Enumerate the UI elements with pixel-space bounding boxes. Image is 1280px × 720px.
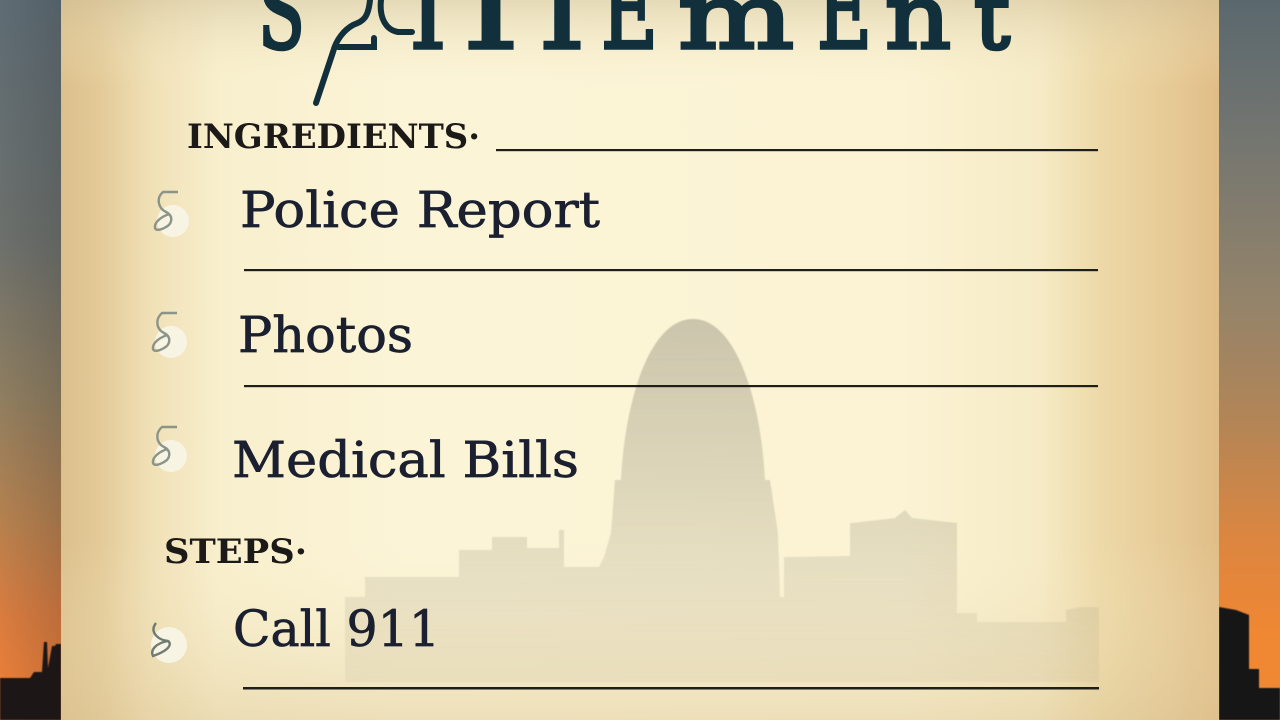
ingredient: police report [155, 181, 1098, 271]
heading: steps: STEPS· [164, 532, 307, 572]
ingredient: photos [153, 306, 1098, 387]
right city silhouette [1219, 607, 1280, 720]
left city silhouette [0, 642, 61, 720]
icon: paperclip [151, 623, 187, 663]
sky shading beside card [0, 0, 62, 720]
label: Police Report [240, 181, 600, 239]
label: Call 911 [233, 600, 440, 658]
faded city skyline watermark [345, 319, 1099, 682]
ingredient: medical bills [153, 427, 579, 489]
icon: paperclip [155, 192, 189, 237]
rule [244, 385, 1098, 387]
heading rule [496, 149, 1098, 151]
heading: ingredients: INGREDIENTS· [187, 117, 480, 157]
icon: paperclip [153, 427, 187, 472]
rule [243, 687, 1099, 690]
sunset sky right strip [1218, 0, 1280, 720]
rule [244, 269, 1098, 271]
step: call 911 [151, 600, 1099, 690]
icon: paperclip [153, 313, 187, 358]
title flourish stroke [316, 0, 412, 103]
title: Settlement (cropped at top) [258, 0, 1010, 73]
label: Photos [238, 306, 413, 364]
sunset sky left strip [0, 0, 62, 720]
label: Medical Bills [232, 431, 579, 489]
